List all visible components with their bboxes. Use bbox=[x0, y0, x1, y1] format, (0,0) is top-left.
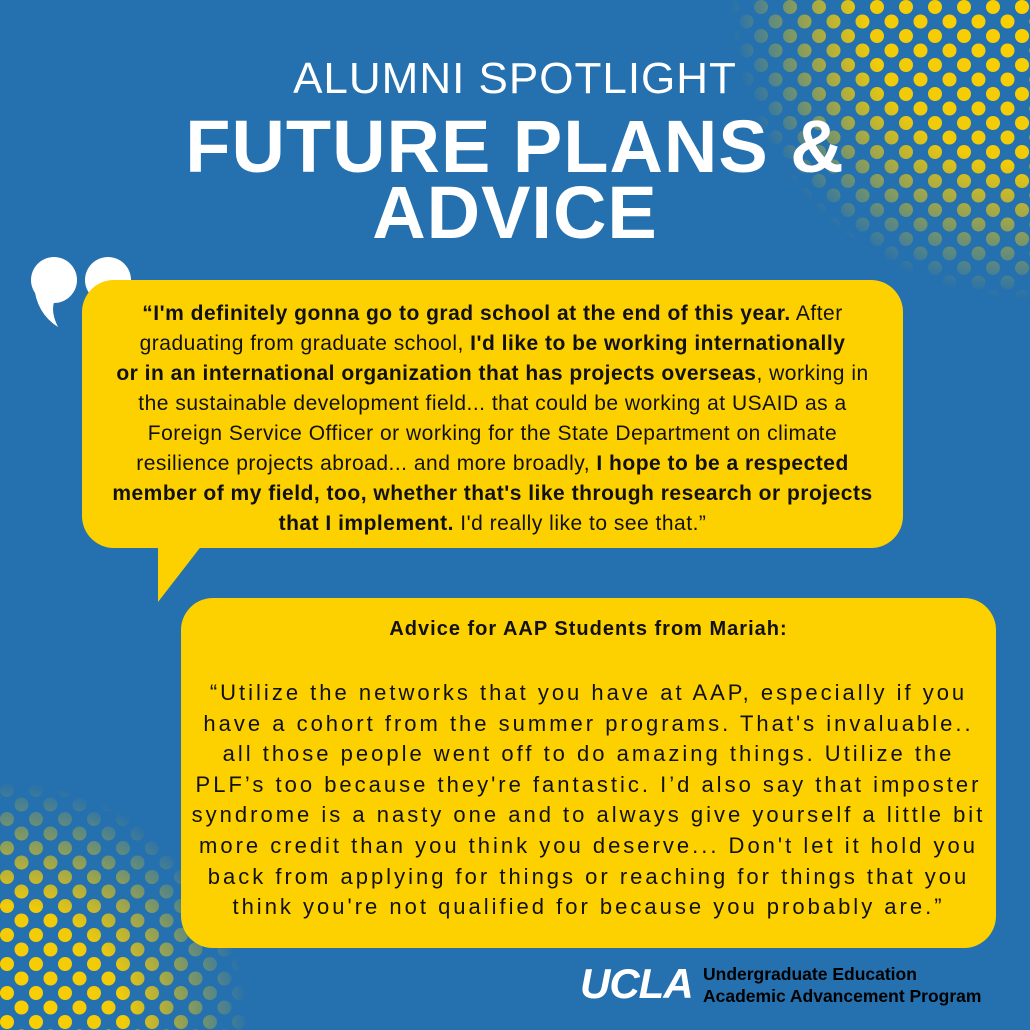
panel: quote bubble: the sustainable development field... that could be working at USAID as a bbox=[138, 392, 847, 415]
title: future plans & advice: ADVICE bbox=[372, 171, 658, 254]
advice text: more credit than you think you deserve... Don't let it hold you bbox=[199, 833, 978, 858]
logo: UCLA: UCLA bbox=[580, 960, 693, 1007]
advice text: PLF’s too because they're fantastic. I’d also say that imposter bbox=[196, 772, 981, 797]
advice heading: Advice for AAP Students from Mariah: bbox=[389, 618, 788, 640]
panel: quote bubble: “I'm definitely gonna go to grad school at the end of this year. After bbox=[142, 302, 843, 325]
advice text: think you're not qualified for because you probably are.” bbox=[232, 894, 945, 919]
logo text bbox=[703, 964, 981, 1006]
panel: quote bubble: graduating from graduate school, I'd like to be working internationally bbox=[140, 332, 845, 355]
advice text: all those people went off to do amazing things. Utilize the bbox=[223, 741, 954, 766]
panel: quote bubble: resilience projects abroad... and more broadly, I hope to be a respected bbox=[136, 452, 849, 475]
panel: advice bbox=[181, 598, 996, 948]
speech bubble tail bbox=[158, 548, 200, 602]
panel: quote bubble: Foreign Service Officer or working for the State Department on climate bbox=[148, 422, 837, 445]
title: alumni spotlight: ALUMNI SPOTLIGHT bbox=[293, 54, 737, 103]
title: future plans & advice: FUTURE PLANS & bbox=[185, 105, 845, 188]
advice text bbox=[192, 680, 985, 919]
logo text: Undergraduate Education bbox=[703, 964, 917, 984]
advice text: have a cohort from the summer programs. That's invaluable.. bbox=[203, 711, 974, 736]
panel: quote bubble: or in an international organization that has projects overseas, working in bbox=[116, 362, 869, 385]
advice text: back from applying for things or reaching for things that you bbox=[208, 864, 969, 889]
logo text: Academic Advancement Program bbox=[703, 986, 981, 1006]
panel: quote bubble: that I implement. I'd really like to see that.” bbox=[279, 512, 706, 535]
icon: quote mark bbox=[31, 257, 131, 327]
panel: quote bubble bbox=[82, 280, 903, 548]
advice text: syndrome is a nasty one and to always give yourself a little bit bbox=[192, 802, 985, 827]
panel: quote bubble: member of my field, too, whether that's like through research or projects bbox=[112, 482, 873, 505]
title: future plans & advice bbox=[185, 105, 845, 254]
advice text: “Utilize the networks that you have at AAP, especially if you bbox=[210, 680, 967, 705]
